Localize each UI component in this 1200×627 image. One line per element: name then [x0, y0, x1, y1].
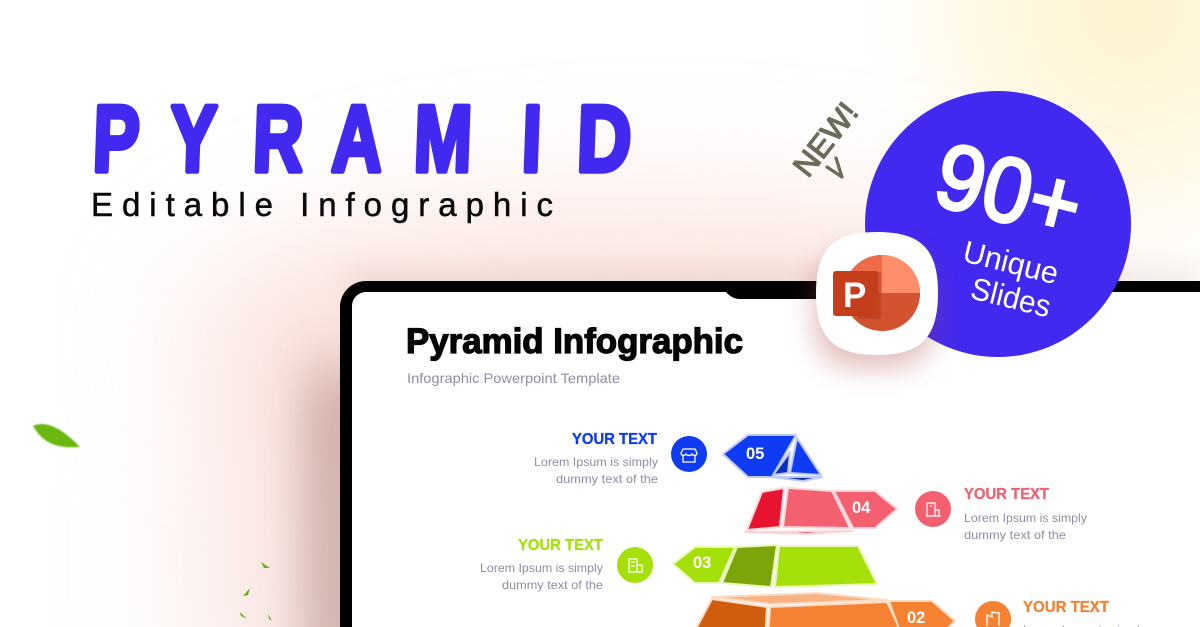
- pyramid level 04: [745, 488, 897, 534]
- item 02 text: YOUR TEXT: [1023, 599, 1109, 616]
- slide heading: Pyramid Infographic: [406, 322, 743, 361]
- item 05 text: [534, 431, 658, 486]
- shadow of app icon: [814, 253, 934, 368]
- title: PYRAMID: [91, 86, 633, 192]
- icon: item 02: [975, 601, 1011, 627]
- pyramid level 04: 04: [852, 499, 871, 517]
- badge: 90+ unique slides: Slides: [967, 271, 1054, 324]
- subtitle: Editable Infographic: [91, 186, 553, 223]
- icon: office building: [915, 491, 951, 527]
- item 05 text: dummy text of the: [556, 472, 658, 486]
- pyramid level 02: [690, 593, 955, 627]
- item 02 text: [1023, 600, 1139, 627]
- title: PYRAMID: I: [520, 86, 543, 191]
- item 03 text: Lorem Ipsum is simply: [480, 561, 603, 575]
- title: PYRAMID: M: [412, 86, 474, 191]
- decorative small leaves: [240, 562, 272, 621]
- laptop screen frame: [340, 281, 1200, 627]
- title: PYRAMID: R: [251, 86, 305, 191]
- title: PYRAMID: D: [575, 87, 633, 192]
- label: NEW!: NEW!: [786, 96, 865, 183]
- pyramid level 05: 05: [746, 445, 764, 463]
- item 05 text: YOUR TEXT: [572, 431, 657, 448]
- pyramid level 03: [673, 545, 877, 587]
- title: PYRAMID: A: [330, 86, 384, 191]
- pyramid level 05: [723, 435, 822, 481]
- pyramid level 02: 02: [907, 609, 925, 627]
- item 03 text: [480, 537, 603, 592]
- icon: shop: [671, 436, 707, 472]
- item 04 text: YOUR TEXT: [964, 486, 1049, 503]
- decorative large leaf: [33, 424, 80, 447]
- item 04 text: [964, 486, 1087, 542]
- title: PYRAMID: Y: [168, 86, 218, 191]
- item 03 text: YOUR TEXT: [518, 537, 603, 554]
- item 04 text: Lorem Ipsum is simply: [964, 511, 1087, 525]
- slide subheading: Infographic Powerpoint Template: [407, 370, 620, 386]
- badge: 90+ unique slides: 90+: [926, 124, 1092, 258]
- pyramid level 03: 03: [693, 554, 711, 572]
- item 05 text: Lorem Ipsum is simply: [534, 455, 658, 469]
- item 04 text: dummy text of the: [964, 528, 1066, 542]
- badge: 90+ unique slides: Unique: [960, 234, 1062, 291]
- badge: 90+ unique slides: [865, 91, 1131, 357]
- item 03 text: dummy text of the: [502, 578, 603, 592]
- icon: PowerPoint: P: [843, 276, 866, 315]
- title: PYRAMID: P: [91, 86, 141, 191]
- icon: building: [617, 547, 653, 583]
- icon: PowerPoint: [816, 232, 938, 355]
